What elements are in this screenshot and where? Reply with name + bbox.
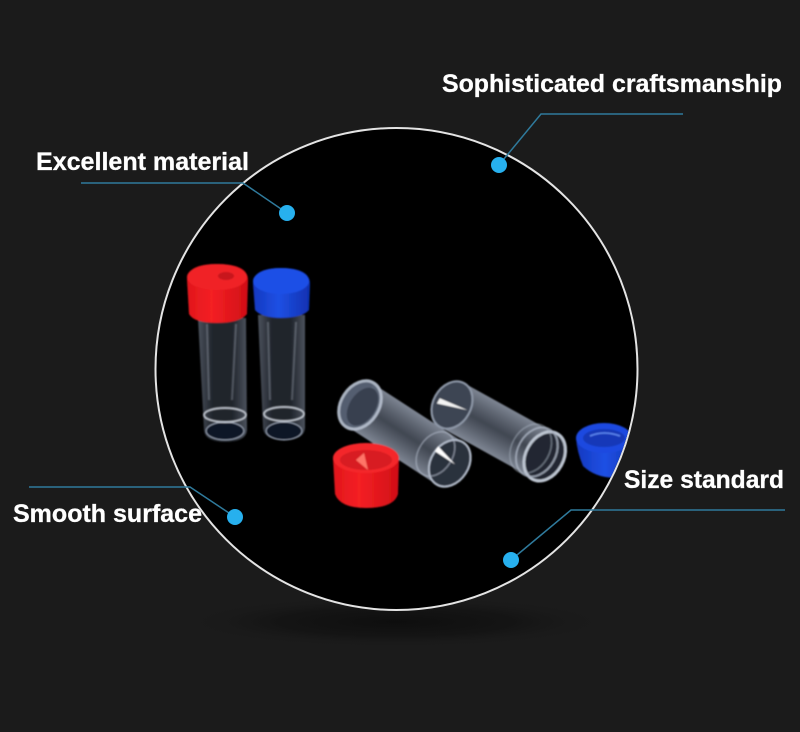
callout: Size standard: Size standard [624, 466, 784, 494]
blue cap, open side up [575, 422, 628, 478]
callout: Sophisticated craftsmanship [442, 70, 782, 173]
lying tube, left [336, 378, 473, 489]
lying tube, right [430, 379, 568, 484]
infographic canvas [14, 74, 785, 632]
callout: Sophisticated craftsmanship: Sophisticated craftsmanship [442, 70, 782, 98]
callout: Excellent material [36, 148, 295, 221]
ground shadow [181, 596, 611, 648]
callout: Smooth surface: Smooth surface [13, 500, 202, 528]
callout: Excellent material: Excellent material [36, 148, 249, 176]
callout: Smooth surface [13, 487, 243, 528]
upright tube with red cap [187, 264, 248, 442]
upright tube with blue cap [253, 268, 310, 440]
callout: Size standard [503, 466, 785, 568]
red cap, open side up [333, 443, 399, 508]
product photo: sample tubes [187, 264, 640, 508]
circular photo panel [156, 128, 638, 610]
